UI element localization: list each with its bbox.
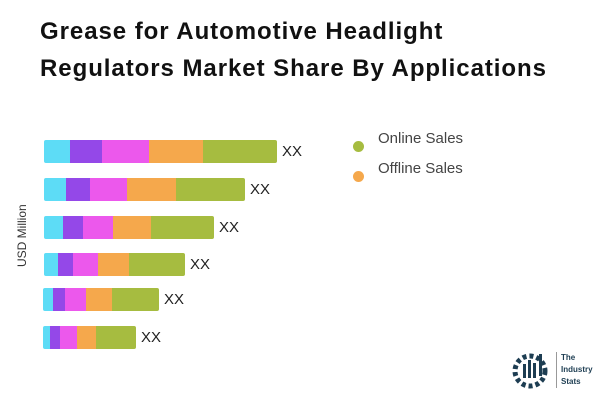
bar row 3 [44,216,214,239]
logo [512,352,593,388]
title: Regulators Market Share By Applications [40,55,547,82]
bar row 2 [44,178,245,201]
legend: Online Sales [378,130,463,147]
value label 3: XX [219,219,239,236]
logo text [556,352,593,388]
legend: online sales [353,130,463,152]
y-axis label: USD Million [15,204,29,267]
legend: offline sales [353,160,463,182]
value label 1: XX [282,143,302,160]
title: Grease for Automotive Headlight [40,18,443,45]
value label 5: XX [164,291,184,308]
bar row 6 [43,326,136,349]
value label 6: XX [141,329,161,346]
value label 4: XX [190,256,210,273]
bar row 1 [44,140,277,163]
legend [353,130,463,182]
title [40,18,547,82]
logo text: Stats [561,377,581,386]
bar row 4 [44,253,185,276]
value label 2: XX [250,181,270,198]
bar row 5 [43,288,159,311]
legend: Offline Sales [378,160,463,177]
icon: gear [512,354,548,388]
bar chart [43,140,302,349]
logo text: Industry [561,365,593,374]
logo text: The [561,353,575,362]
